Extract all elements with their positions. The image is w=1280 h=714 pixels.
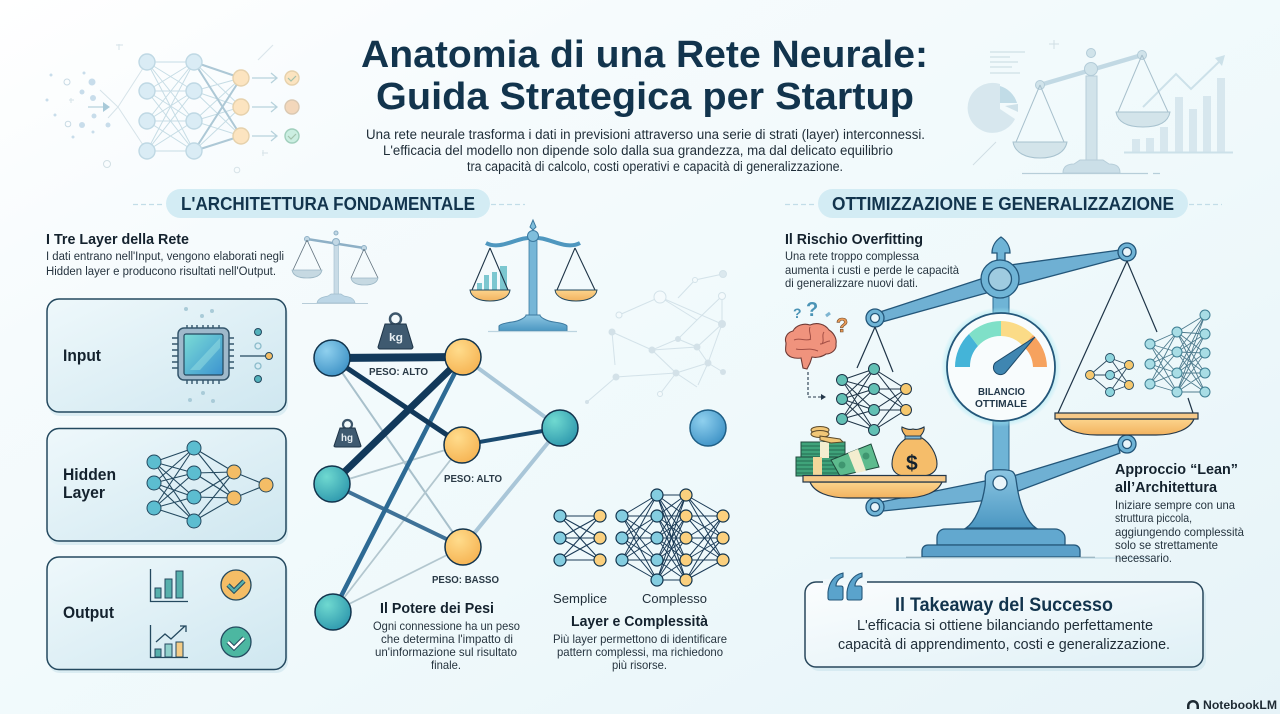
text block: layer e complessità [553, 614, 727, 672]
icon: simple network [554, 510, 606, 566]
icon: brain with question marks: ? [836, 315, 848, 337]
card: input [47, 299, 288, 416]
card: hidden layer [47, 428, 288, 545]
icon: quote marks [828, 573, 862, 600]
title: Guida Strategica per Startup [376, 76, 914, 118]
label: peso alto 2: PESO: ALTO [444, 473, 502, 485]
text block: rischio overfitting: Una rete troppo complessa [785, 249, 919, 263]
text block: il potere dei pesi: un'informazione sul risultato [375, 645, 517, 659]
title [361, 34, 928, 118]
weight icon: kg [378, 314, 413, 349]
icon: complex network [616, 489, 729, 586]
node: hidden middle [444, 427, 480, 463]
text block: i tre layer: I Tre Layer della Rete [46, 232, 189, 248]
icon: overfit network on left pan [836, 364, 912, 436]
node: input bottom [315, 594, 351, 630]
card: output [47, 557, 288, 673]
section heading: ottimizzazione [785, 189, 1222, 218]
icon: brain with question marks [785, 299, 848, 369]
label: hidden layer: Layer [63, 484, 106, 502]
label: peso alto 1: PESO: ALTO [369, 366, 428, 378]
icon: orange check [221, 570, 251, 600]
text block: rischio overfitting: aumenta i custi e perde le capacità [785, 263, 959, 277]
gauge: bilancio ottimale: BILANCIO [978, 386, 1025, 398]
label: hidden layer: Hidden [63, 466, 116, 484]
text block: rischio overfitting [785, 232, 959, 290]
text block: i tre layer: Hidden layer e producono risultati nell'Output. [46, 266, 276, 278]
text block: layer e complessità: Layer e Complessità [571, 614, 709, 630]
title: Anatomia di una Rete Neurale: [361, 34, 928, 76]
label: output: Output [63, 604, 114, 622]
right pan [1055, 413, 1198, 435]
gauge: bilancio ottimale [941, 307, 1061, 427]
text block: il potere dei pesi: finale. [431, 658, 461, 672]
intro text: Una rete neurale trasforma i dati in previsioni attraverso una serie di strati (layer) interconnessi. [366, 127, 925, 142]
panel: takeaway [805, 573, 1206, 671]
icon: trend chart [150, 625, 188, 658]
decorative header illustration: neural network [46, 44, 299, 173]
text block: layer e complessità: Più layer permettono di identificare [553, 632, 727, 646]
gauge: bilancio ottimale: OTTIMALE [975, 398, 1027, 410]
text block: layer e complessità: pattern complessi, ma richiedono [557, 645, 723, 659]
node: output [542, 410, 578, 446]
text block: layer e complessità: più risorse. [612, 658, 667, 672]
arrow: dashed brain to network [808, 372, 826, 400]
decorative sphere [690, 410, 726, 446]
weight icon: kg: kg [389, 332, 403, 344]
icon: chip [172, 307, 272, 403]
icon: network [147, 441, 273, 528]
text block: rischio overfitting: Il Rischio Overfitting [785, 232, 923, 248]
decorative header illustration: scale and charts [968, 40, 1233, 174]
pivots and finial [866, 237, 1136, 516]
icon: small network on right pan [1086, 354, 1134, 396]
illustration: balance scale [785, 237, 1210, 558]
text block: il potere dei pesi: che determina l'impatto di [381, 632, 513, 646]
takeaway heading: Il Takeaway del Successo [895, 595, 1113, 616]
scale post [993, 290, 1009, 480]
text block: approccio lean: struttura piccola, [1115, 511, 1192, 525]
intro text: tra capacità di calcolo, costi operativi e capacità di generalizzazione. [467, 159, 843, 174]
chart: weighted network diagram [314, 314, 578, 630]
text block: approccio lean: aggiungendo complessità [1115, 525, 1244, 539]
connections [332, 357, 560, 612]
takeaway text: capacità di apprendimento, costi e generalizzazione. [838, 637, 1170, 653]
hanger lines [857, 261, 1193, 413]
text block: rischio overfitting: di generalizzare nuovi dati. [785, 276, 918, 290]
weight icon: hg: hg [341, 433, 353, 444]
node: hidden top [445, 339, 481, 375]
icon: bar chart [150, 569, 188, 602]
icon: money bag: $ [906, 452, 918, 475]
label: input: Input [63, 347, 101, 365]
icon: large network on right pan [1145, 310, 1210, 397]
logo: NotebookLM: NotebookLM [1203, 698, 1277, 712]
label: complesso: Complesso [642, 591, 707, 606]
label: semplice: Semplice [553, 591, 607, 606]
icon: green check [221, 627, 251, 657]
text block: il potere dei pesi [373, 601, 520, 672]
text block: il potere dei pesi: Ogni connessione ha un peso [373, 619, 520, 633]
icon: brain with question marks: ? [793, 305, 802, 321]
icon: faded small scale [292, 231, 378, 304]
node: input middle [314, 466, 350, 502]
text block: approccio lean: Approccio “Lean” [1115, 462, 1238, 478]
intro text: L'efficacia del modello non dipende solo dalla sua grandezza, ma dal delicato equilibrio [383, 143, 893, 158]
text block: il potere dei pesi: Il Potere dei Pesi [380, 601, 494, 617]
takeaway text: L'efficacia si ottiene bilanciando perfettamente [857, 618, 1153, 634]
text block: approccio lean: solo se strettamente [1115, 538, 1218, 552]
intro text [366, 127, 925, 174]
faded decorative network [585, 270, 726, 404]
node: input top [314, 340, 350, 376]
text block: approccio lean: necessario. [1115, 551, 1172, 565]
scale beams [880, 250, 1120, 511]
icon: money bag [892, 427, 937, 476]
text block: approccio lean: Iniziare sempre con una [1115, 498, 1235, 512]
text block: approccio lean [1115, 462, 1244, 565]
takeaway text [838, 618, 1170, 653]
scale base [830, 470, 1150, 558]
icon: blue scale with bars [470, 220, 597, 332]
left pan [803, 476, 946, 498]
icon: money and coins [796, 426, 879, 476]
section heading: ottimizzazione: OTTIMIZZAZIONE E GENERALIZZAZIONE [832, 194, 1174, 214]
section heading: architettura: L'ARCHITETTURA FONDAMENTALE [181, 194, 475, 214]
text block: i tre layer: I dati entrano nell'Input, vengono elaborati negli [46, 251, 284, 263]
section heading: architettura [133, 189, 525, 218]
label: hidden layer [63, 466, 116, 502]
node: hidden bottom [445, 529, 481, 565]
label: peso basso: PESO: BASSO [432, 574, 499, 586]
weight icon: hg [334, 420, 361, 447]
text block: i tre layer [46, 232, 284, 278]
text block: approccio lean: all’Architettura [1115, 480, 1218, 496]
icon: brain with question marks: ? [806, 299, 818, 321]
